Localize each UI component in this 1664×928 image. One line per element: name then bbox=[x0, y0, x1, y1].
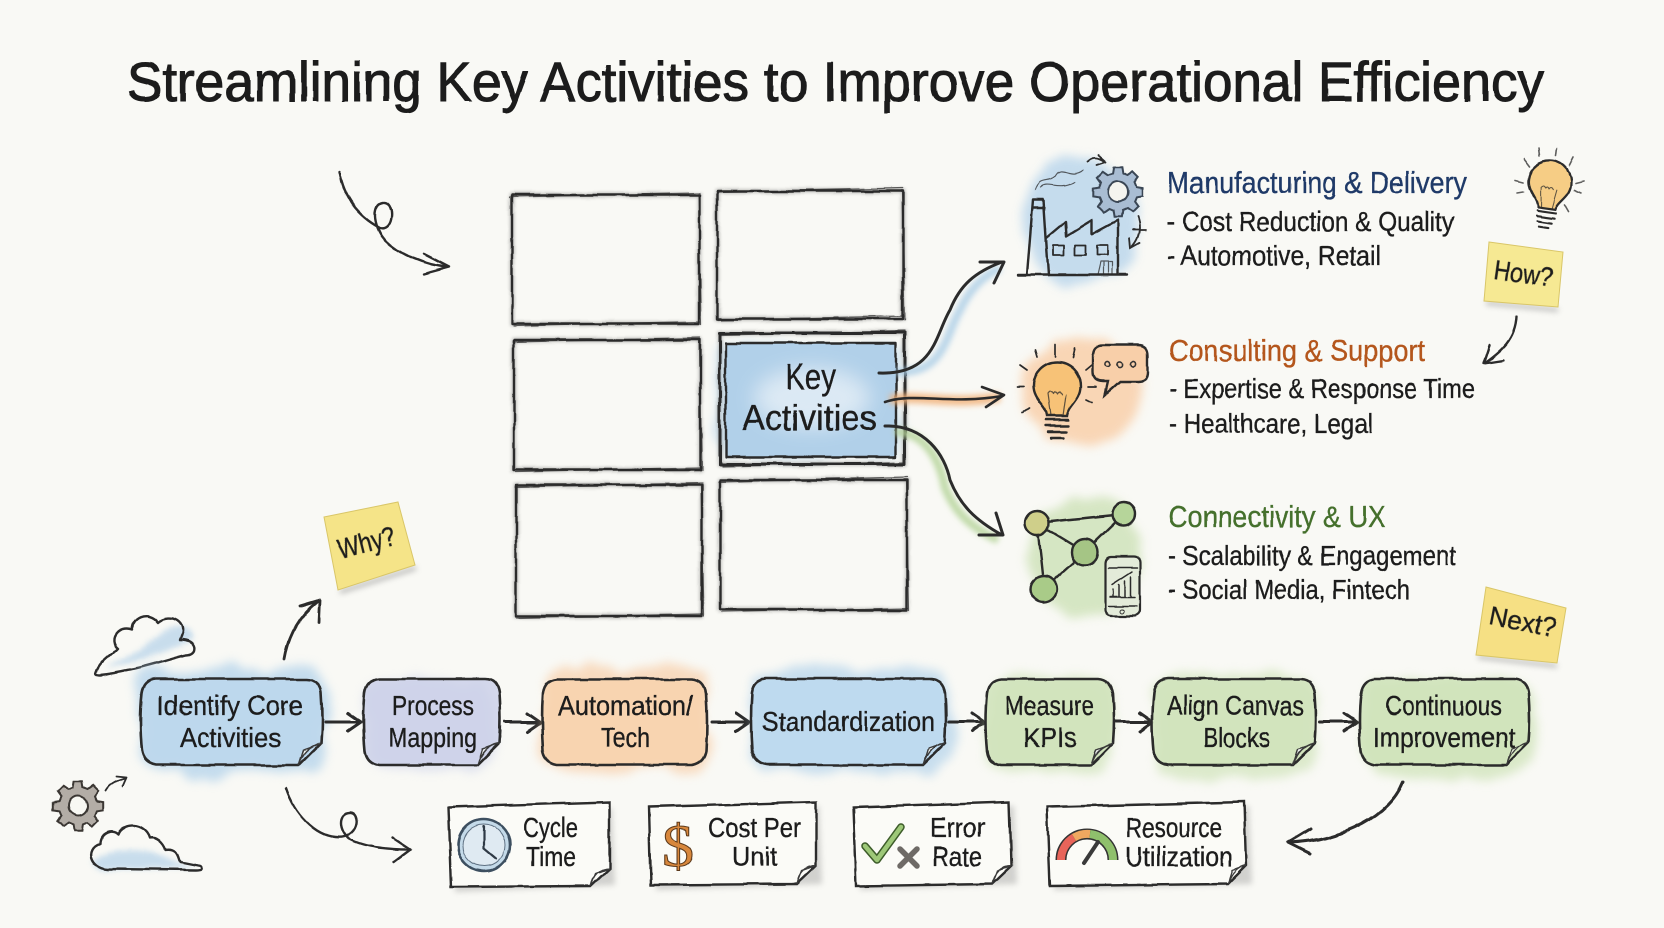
heading: Manufacturing & Delivery bbox=[1167, 165, 1467, 200]
arrow: step 4 to 5 bbox=[949, 713, 985, 731]
icon: cloud lower left bbox=[91, 825, 201, 870]
pale wash inside cell bbox=[754, 368, 870, 428]
sticky note: next: Next? bbox=[1487, 601, 1559, 643]
bullet list bbox=[1169, 373, 1475, 439]
bullet list: - Healthcare, Legal bbox=[1169, 408, 1373, 439]
icon: gear with arrow bbox=[53, 776, 127, 831]
canvas cell: middle left bbox=[513, 338, 702, 472]
step: identify core activities: Activities bbox=[180, 722, 281, 753]
sticky note: how: How? bbox=[1492, 254, 1555, 293]
metric: cycle time bbox=[448, 802, 615, 892]
canvas cell: bottom right bbox=[719, 477, 909, 612]
icon: dollar sign: $ bbox=[662, 813, 694, 879]
step: align canvas blocks: Align Canvas bbox=[1167, 690, 1304, 721]
bullet list bbox=[1167, 206, 1454, 271]
metric: cost per unit: Unit bbox=[732, 841, 777, 872]
step: measure kpis: Measure bbox=[1005, 690, 1094, 721]
watercolor wash bbox=[716, 345, 902, 457]
icon: cloud upper left bbox=[96, 615, 194, 675]
bullet list bbox=[1168, 540, 1456, 605]
step: continuous improvement: Improvement bbox=[1373, 722, 1515, 753]
metric: resource utilization: Resource bbox=[1126, 812, 1222, 843]
icon: light bulb and speech bubble bbox=[1018, 333, 1148, 449]
canvas cell: top right bbox=[716, 188, 905, 320]
step: process mapping bbox=[364, 679, 500, 768]
step: automation tech: Tech bbox=[601, 722, 650, 753]
arrow: step 6 to 7 bbox=[1320, 713, 1357, 731]
metric: error rate bbox=[853, 802, 1017, 890]
heading: Connectivity & UX bbox=[1168, 499, 1386, 534]
sticky note: how bbox=[1484, 242, 1563, 310]
panel: manufacturing and delivery bbox=[1018, 155, 1467, 286]
arrow: key activities to connectivity bbox=[885, 426, 1003, 540]
bullet list: - Social Media, Fintech bbox=[1168, 574, 1410, 605]
metric: cost per unit: Cost Per bbox=[708, 812, 801, 843]
panel: consulting and support bbox=[1018, 333, 1475, 449]
bullet list: - Scalability & Engagement bbox=[1168, 540, 1456, 571]
sticky note: why: Why? bbox=[334, 520, 399, 565]
arrow: top-left loop into canvas bbox=[339, 172, 449, 274]
canvas cell: bottom left bbox=[515, 483, 704, 618]
arrow: identify core to why bbox=[284, 600, 320, 659]
process flow bbox=[138, 666, 1535, 778]
heading: Consulting & Support bbox=[1169, 333, 1425, 368]
metric: cycle time: Time bbox=[526, 841, 576, 872]
bullet list: - Cost Reduction & Quality bbox=[1167, 206, 1454, 237]
step: align canvas blocks: Blocks bbox=[1203, 722, 1270, 753]
arrow: how to consulting bbox=[1484, 317, 1516, 363]
canvas cell: key activities highlighted bbox=[716, 331, 906, 466]
step: standardization: Standardization bbox=[762, 706, 935, 737]
cell label: Activities bbox=[742, 397, 877, 438]
arrow: step 3 to 4 bbox=[712, 713, 749, 731]
cell label bbox=[742, 356, 877, 438]
metrics row bbox=[448, 802, 1252, 892]
step: measure kpis bbox=[986, 676, 1114, 776]
step: continuous improvement bbox=[1360, 679, 1535, 776]
highlighted cell frames bbox=[720, 331, 906, 466]
step: measure kpis: KPIs bbox=[1023, 722, 1077, 753]
metric: cost per unit bbox=[649, 802, 822, 890]
step: process mapping: Process bbox=[392, 690, 474, 721]
step: identify core activities bbox=[138, 668, 328, 774]
step: process mapping: Mapping bbox=[388, 722, 477, 753]
sticky note: next bbox=[1476, 587, 1566, 666]
canvas cell: top left bbox=[510, 193, 701, 326]
arrow: step 1 to 2 bbox=[325, 713, 361, 731]
step: standardization bbox=[751, 666, 952, 774]
sticky note: why bbox=[324, 502, 416, 592]
title: Streamlining Key Activities to Improve Operational Efficiency bbox=[127, 50, 1544, 113]
icon: top-right light bulb bbox=[1516, 148, 1584, 230]
step: align canvas blocks bbox=[1152, 672, 1316, 778]
step: continuous improvement: Continuous bbox=[1385, 690, 1502, 721]
icon: factory with gear bbox=[1018, 155, 1146, 286]
cell label: Key bbox=[785, 356, 836, 397]
highlighted cell fill bbox=[726, 343, 896, 457]
step: identify core activities: Identify Core bbox=[157, 690, 303, 721]
panel: connectivity and ux bbox=[1025, 494, 1456, 618]
arrow: step 5 to 6 bbox=[1116, 713, 1153, 731]
icon: gauge bbox=[1061, 834, 1113, 863]
metric: resource utilization: Utilization bbox=[1125, 841, 1233, 872]
icon: check mark and cross bbox=[865, 827, 917, 866]
metric: error rate: Error bbox=[930, 812, 985, 843]
step: automation tech bbox=[542, 670, 708, 772]
arrow: key activities to manufacturing bbox=[879, 262, 1004, 373]
arrow: step 2 to 3 bbox=[505, 713, 540, 731]
bullet list: - Expertise & Response Time bbox=[1169, 373, 1475, 404]
arrow: identify core loop to metrics bbox=[286, 788, 410, 862]
arrow: continuous improvement to metrics bbox=[1288, 782, 1403, 854]
metric: cycle time: Cycle bbox=[523, 812, 578, 843]
arrow: key activities to consulting bbox=[885, 387, 1004, 407]
metric: error rate: Rate bbox=[932, 841, 982, 872]
icon: clock bbox=[458, 819, 510, 871]
business canvas grid bbox=[510, 188, 909, 618]
metric: resource utilization bbox=[1047, 802, 1252, 890]
icon: network and phone bbox=[1025, 494, 1143, 618]
step: automation tech: Automation/ bbox=[558, 690, 693, 721]
bullet list: - Automotive, Retail bbox=[1167, 240, 1381, 271]
